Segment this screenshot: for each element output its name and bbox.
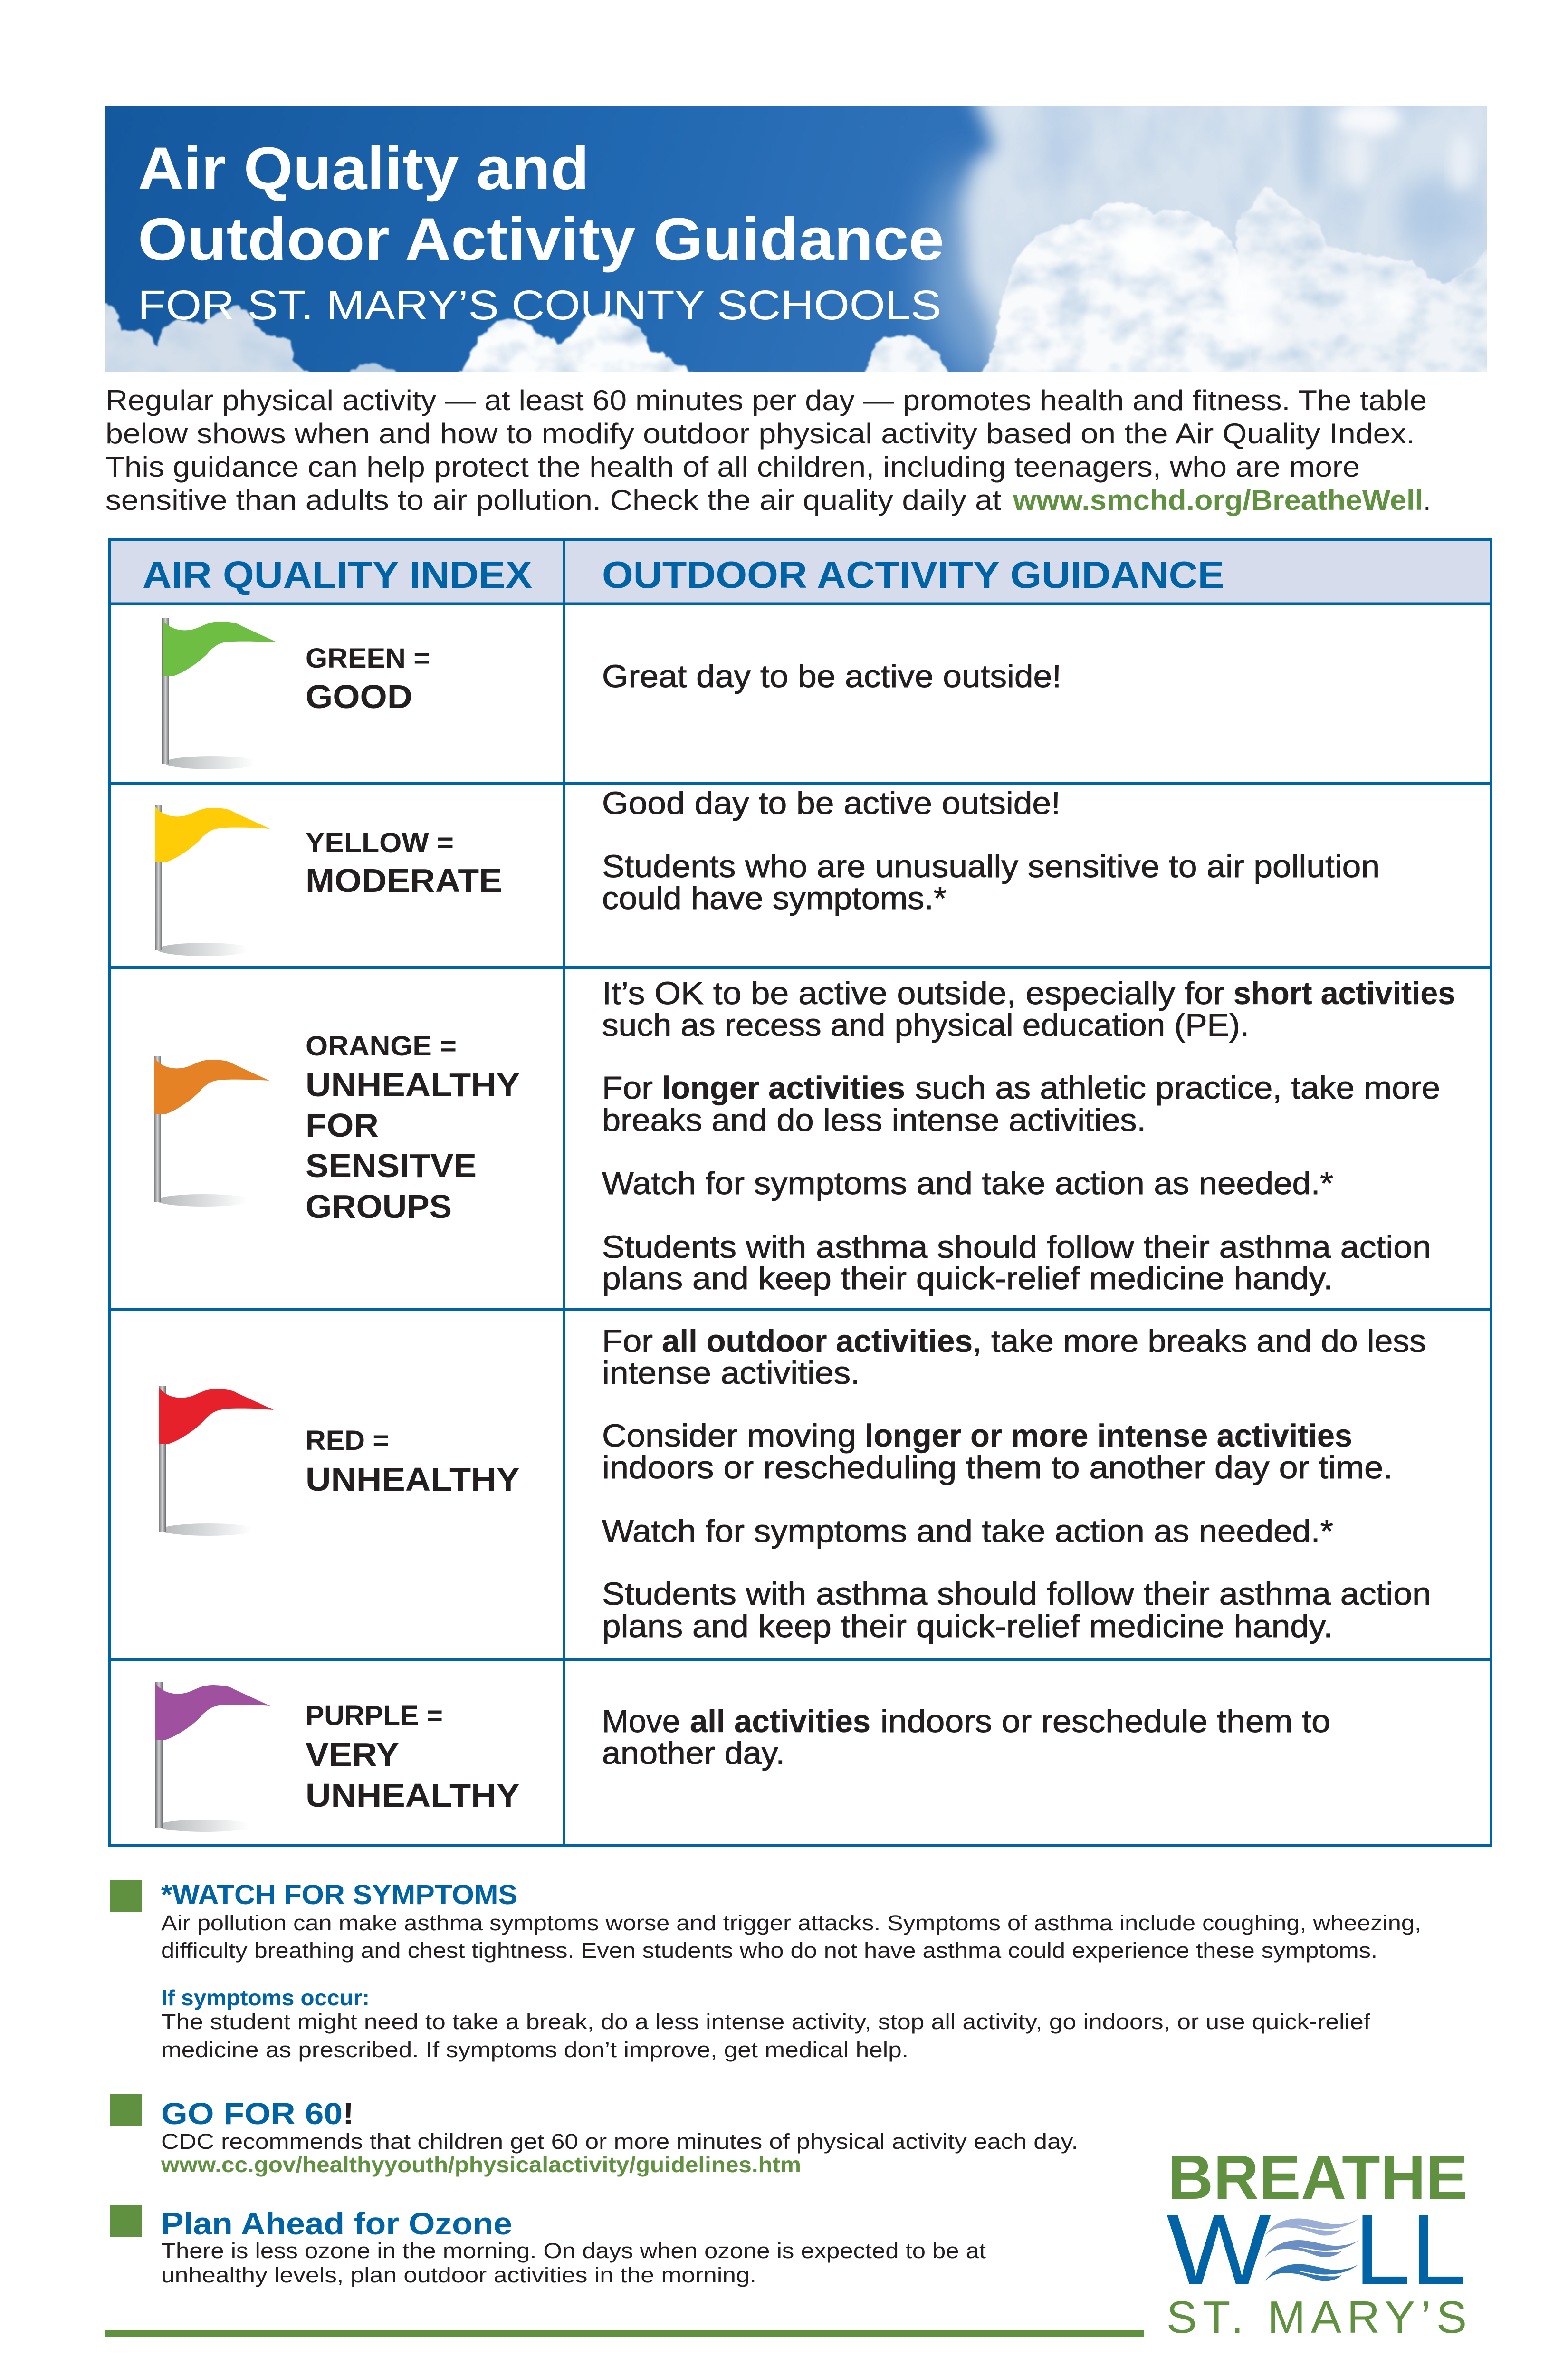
heading: watch for symptoms: *WATCH FOR SYMPTOMS (161, 1879, 517, 1910)
guidance: red: Watch for symptoms and take action as needed.* (602, 1514, 1333, 1549)
guidance: red: longer or more intense activities (865, 1418, 1352, 1454)
icon: red flag (159, 1386, 274, 1536)
subtitle: FOR ST. MARY’S COUNTY SCHOOLS (138, 282, 941, 328)
title: Outdoor Activity Guidance (138, 205, 944, 273)
symptoms text: Air pollution can make asthma symptoms worse and trigger attacks. Symptoms of asthma include coughing, wheezing, (161, 1911, 1421, 1935)
guidance: orange: breaks and do less intense activities. (602, 1102, 1146, 1138)
aqi label: green good: GREEN = (306, 643, 430, 674)
aqi label: orange unhealthy for sensitive groups: UNHEALTHY (306, 1066, 520, 1103)
aqi label: purple very unhealthy: VERY (306, 1736, 399, 1773)
guidance: orange: Students with asthma should follow their asthma action (602, 1229, 1431, 1265)
logo: breathe well st. mary's (1166, 2142, 1468, 2343)
guidance: purple: indoors or reschedule them to (880, 1704, 1330, 1739)
aqi label: orange unhealthy for sensitive groups: ORANGE = (306, 1031, 457, 1062)
guidance: orange (602, 976, 1455, 1296)
guidance: yellow: Students who are unusually sensitive to air pollution (602, 849, 1380, 884)
guidance: orange: such as athletic practice, take more (915, 1070, 1440, 1106)
clouds lower left (95, 304, 950, 375)
aqi label: purple very unhealthy (306, 1700, 520, 1814)
aqi label: orange unhealthy for sensitive groups (306, 1031, 520, 1225)
aqi label: purple very unhealthy: PURPLE = (306, 1700, 443, 1731)
intro text block: . (1423, 484, 1431, 516)
column heading: outdoor activity guidance: OUTDOOR ACTIVITY GUIDANCE (602, 554, 1224, 596)
cdc text: CDC recommends that children get 60 or more minutes of physical activity each day. (161, 2129, 1078, 2154)
icon: orange flag (154, 1056, 269, 1207)
if symptoms text: medicine as prescribed. If symptoms don’t improve, get medical help. (161, 2038, 908, 2062)
guidance: red: take more breaks and do less (991, 1323, 1426, 1359)
guidance: purple: Move (602, 1704, 680, 1739)
guidance: yellow: Good day to be active outside! (602, 786, 1061, 821)
aqi label: red unhealthy: RED = (306, 1425, 389, 1456)
guidance: orange: longer activities (662, 1070, 905, 1106)
logo: breathe well st. mary's: W (1166, 2194, 1271, 2306)
icon: purple flag (155, 1682, 270, 1832)
ozone text: There is less ozone in the morning. On days when ozone is expected to be at (161, 2239, 986, 2263)
table header band (110, 539, 1491, 604)
intro text block: Regular physical activity — at least 60 minutes per day — promotes health and fitness. The table (105, 384, 1427, 416)
guidance: red: Consider moving (602, 1418, 856, 1454)
guidance: orange: such as recess and physical education (PE). (602, 1007, 1249, 1043)
intro text block: www.smchd.org/BreatheWell (1013, 484, 1423, 516)
sky clouds background (904, 106, 1487, 372)
aqi label: green good: GOOD (306, 678, 412, 715)
guidance: purple (602, 1704, 1330, 1771)
guidance: orange: short activities (1233, 976, 1455, 1011)
ozone text (161, 2239, 986, 2287)
guidance: red (602, 1323, 1431, 1644)
icon: yellow flag (155, 805, 270, 956)
ozone text: unhealthy levels, plan outdoor activities in the morning. (161, 2263, 756, 2287)
if symptoms text (161, 2010, 1371, 2062)
aqi label: yellow moderate (306, 827, 502, 899)
aqi label: purple very unhealthy: UNHEALTHY (306, 1777, 520, 1814)
guidance: red: plans and keep their quick-relief medicine handy. (602, 1609, 1333, 1644)
guidance: orange: plans and keep their quick-relief medicine handy. (602, 1261, 1333, 1296)
guidance: red: indoors or rescheduling them to another day or time. (602, 1450, 1393, 1485)
title (138, 134, 944, 273)
heading: go for 60: GO FOR 60 ! (161, 2097, 354, 2131)
symptoms text: difficulty breathing and chest tightness. Even students who do not have asthma could experience these symptoms. (161, 1938, 1377, 1963)
aqi label: yellow moderate: YELLOW = (306, 827, 454, 858)
guidance: red: , (973, 1323, 982, 1359)
intro text block: This guidance can help protect the health of all children, including teenagers, who are more (105, 451, 1360, 483)
link: www.cc.gov/healthyyouth/physicalactivity/guidelines.htm (161, 2152, 801, 2177)
panel: header banner (105, 106, 1487, 372)
guidance: red: For (602, 1323, 653, 1359)
aqi label: green good (306, 643, 430, 715)
guidance: orange: Watch for symptoms and take action as needed.* (602, 1166, 1333, 1201)
logo: breathe well st. mary's: BREATHE (1168, 2142, 1468, 2212)
aqi label: red unhealthy (306, 1425, 520, 1498)
bullet square (110, 1880, 142, 1912)
guidance: orange: It’s OK to be active outside, especially for (602, 976, 1224, 1011)
guidance: purple: all activities (690, 1704, 870, 1739)
aqi label: orange unhealthy for sensitive groups: SENSITVE (306, 1147, 477, 1184)
guidance: red: intense activities. (602, 1355, 860, 1391)
aqi label: orange unhealthy for sensitive groups: GROUPS (306, 1188, 452, 1225)
bullet square (110, 2205, 142, 2237)
guidance: green: Great day to be active outside! (602, 659, 1061, 694)
section: watch for symptoms (110, 1879, 1421, 2062)
aqi label: yellow moderate: MODERATE (306, 862, 502, 899)
section: go for 60 (110, 2094, 1078, 2177)
symptoms text (161, 1911, 1421, 1963)
intro text block: sensitive than adults to air pollution. Check the air quality daily at (105, 484, 1001, 516)
aqi label: orange unhealthy for sensitive groups: FOR (306, 1107, 379, 1144)
logo: breathe well st. mary's: ST. MARY’S (1166, 2292, 1467, 2343)
cumulus cloud right (979, 187, 1497, 380)
icon: green flag (162, 618, 277, 769)
intro text block: below shows when and how to modify outdoor physical activity based on the Air Quality Index. (105, 418, 1415, 450)
subheading: if symptoms occur: If symptoms occur: (161, 1985, 370, 2010)
heading: plan ahead: Plan Ahead for Ozone (161, 2206, 512, 2241)
guidance: red: all outdoor activities (662, 1323, 973, 1359)
title: Air Quality and (138, 134, 589, 202)
aqi label: red unhealthy: UNHEALTHY (306, 1461, 520, 1498)
if symptoms text: The student might need to take a break, do a less intense activity, stop all activity, go indoors, or use quick-relief (161, 2010, 1371, 2034)
guidance: orange: For (602, 1070, 653, 1106)
table grid (110, 539, 1491, 1845)
guidance: red: Students with asthma should follow their asthma action (602, 1576, 1431, 1612)
intro text block (105, 384, 1431, 516)
footer rule (105, 2330, 1144, 2337)
table (110, 539, 1491, 1845)
guidance: purple: another day. (602, 1735, 785, 1771)
bullet square (110, 2094, 142, 2126)
guidance: yellow (602, 786, 1380, 916)
column heading: air quality index: AIR QUALITY INDEX (143, 554, 532, 596)
section: plan ahead for ozone (110, 2205, 986, 2287)
logo: breathe well st. mary's: LL (1354, 2194, 1467, 2306)
guidance: yellow: could have symptoms.* (602, 881, 947, 916)
